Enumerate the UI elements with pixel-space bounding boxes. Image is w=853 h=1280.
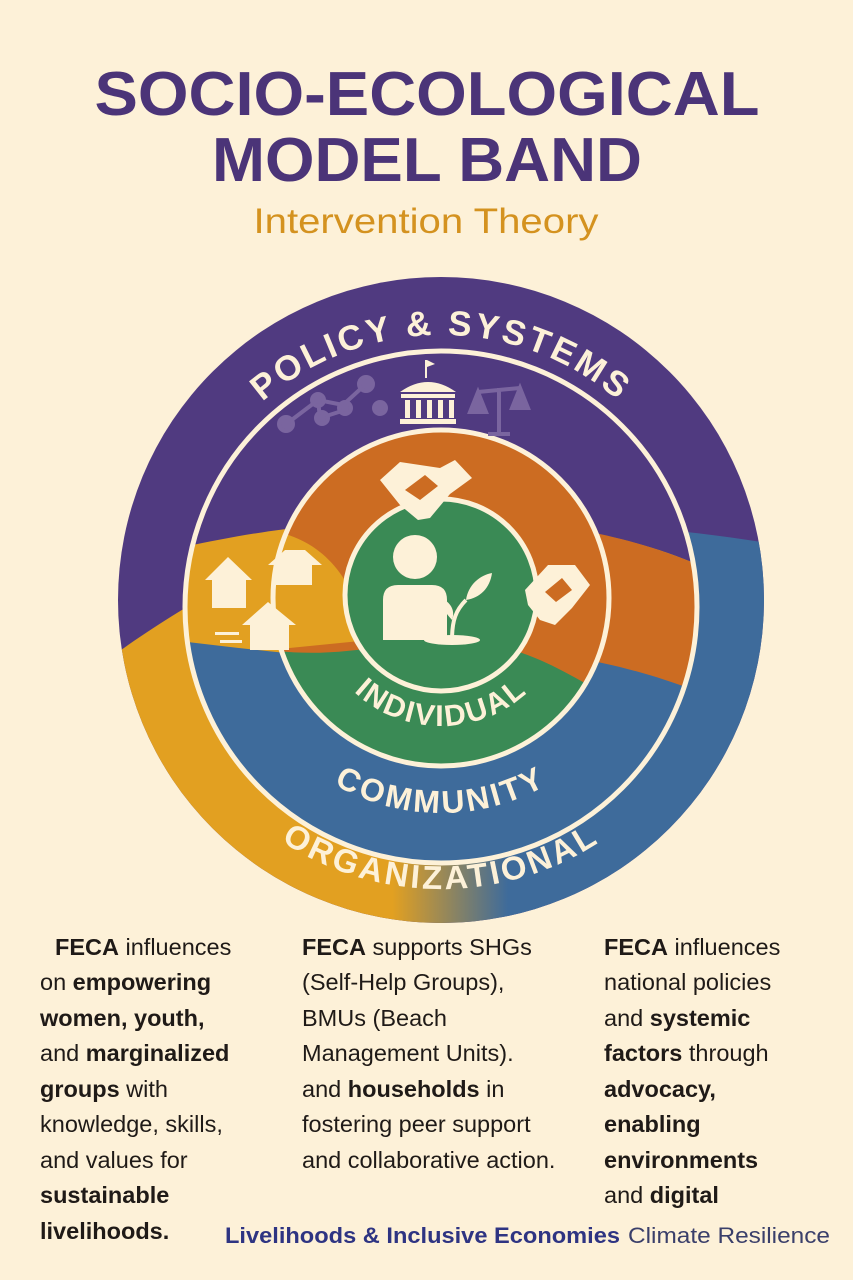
text block: individual column: women, youth,	[39, 1005, 204, 1031]
outer band: policy/organizational	[100, 270, 780, 940]
text block: policy column: factors through	[604, 1040, 769, 1066]
label: community: COMMUNITY	[338, 766, 538, 813]
text block: policy column: enabling	[604, 1111, 701, 1137]
subtitle: Intervention Theory	[254, 202, 599, 241]
text block: individual column: and values for	[40, 1147, 188, 1173]
label: individual: INDIVIDUAL	[355, 677, 526, 726]
icon: person with sprout	[383, 535, 492, 645]
middle band	[188, 525, 694, 860]
diagram: socio-ecological circles	[118, 277, 764, 923]
text block: community column: fostering peer support	[302, 1111, 531, 1137]
text block: policy column: national policies	[604, 969, 771, 995]
text block: policy column: and digital	[604, 1182, 719, 1208]
text block: community column: BMUs (Beach	[302, 1005, 447, 1031]
icon: government building	[400, 360, 456, 424]
label: organizational: ORGANIZATIONAL	[286, 826, 598, 890]
text block: community column: FECA supports SHGs	[302, 934, 532, 960]
text block: individual column: on empowering	[40, 969, 211, 995]
text block: community column: (Self-Help Groups),	[302, 969, 504, 995]
icon: handshake right	[525, 565, 590, 625]
title: MODEL BAND	[212, 126, 642, 195]
text block: policy column: and systemic	[604, 1005, 750, 1031]
title: SOCIO-ECOLOGICAL	[94, 60, 759, 129]
text block: community column: Management Units).	[302, 1040, 514, 1066]
text block: individual column: and marginalized	[40, 1040, 229, 1066]
text block: individual column: livelihoods.	[40, 1218, 169, 1244]
label: policy & systems: POLICY & SYSTEMS	[249, 311, 628, 400]
icon: scales of justice	[470, 388, 528, 434]
text block: individual column: groups with	[40, 1076, 168, 1102]
text block: community column: and collaborative action.	[302, 1147, 555, 1173]
title	[94, 60, 759, 195]
text block: policy column: advocacy,	[604, 1076, 716, 1102]
footer tags: Climate Resilience	[628, 1223, 830, 1248]
text block: individual column: FECA influences	[55, 934, 231, 960]
text block: policy column: FECA influences	[604, 934, 780, 960]
inner band	[284, 432, 594, 764]
icon: houses	[205, 550, 322, 650]
footer tags: Livelihoods & Inclusive Economies	[225, 1223, 620, 1248]
text block: individual column: knowledge, skills,	[40, 1111, 223, 1137]
text block: community column: and households in	[302, 1076, 504, 1102]
individual circle	[345, 499, 537, 691]
icon: network	[279, 377, 386, 431]
text block: individual column: sustainable	[40, 1182, 169, 1208]
text block: policy column: environments	[604, 1147, 758, 1173]
icon: handshake top	[380, 460, 472, 520]
